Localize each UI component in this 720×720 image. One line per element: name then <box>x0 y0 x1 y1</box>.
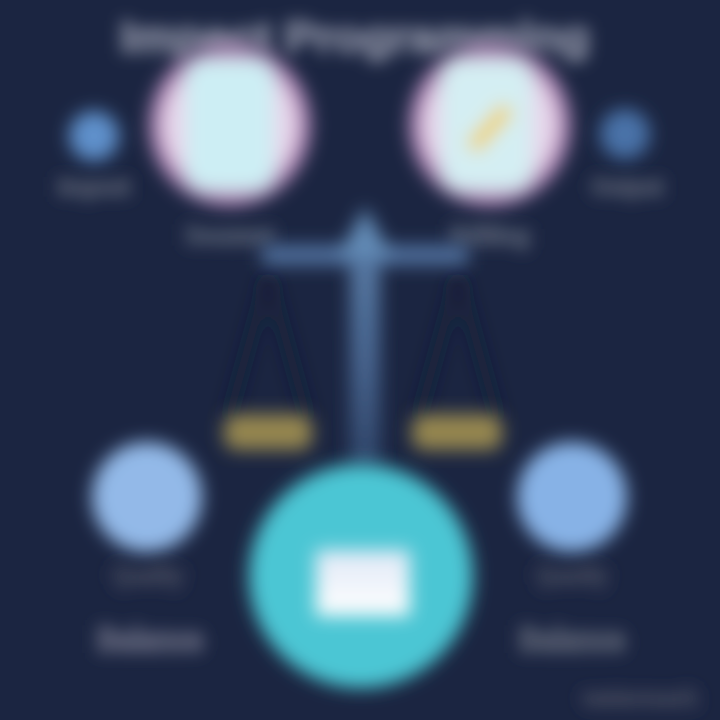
label: right pencil circle: Editing <box>450 220 530 250</box>
label: lower right circle: Quantity <box>536 560 608 590</box>
balance scale <box>224 207 502 470</box>
label: lower left circle: Quality <box>112 560 184 590</box>
icon: central teal circle <box>249 464 473 688</box>
icon: white card <box>316 550 410 616</box>
label: small left circle: Input <box>58 174 130 201</box>
label: left document circle: Document <box>186 220 274 250</box>
icon: small left circle <box>69 111 119 161</box>
left scale pan <box>224 414 312 450</box>
watermark: watermark <box>582 685 698 712</box>
icon: small right circle <box>600 109 650 159</box>
icon: lower right circle <box>517 442 627 552</box>
label: small right circle: Output <box>591 174 663 201</box>
right scale pan <box>412 414 502 450</box>
scale pole and beam <box>262 207 468 470</box>
title: Impact Programming <box>120 13 590 62</box>
icon: left document circle <box>149 44 311 206</box>
text block: lower left: Balance <box>97 621 203 659</box>
scale strings <box>228 275 498 420</box>
icon: lower left circle <box>92 442 202 552</box>
icon: right pencil circle <box>409 44 571 206</box>
text block: lower right: Balance <box>519 621 625 659</box>
